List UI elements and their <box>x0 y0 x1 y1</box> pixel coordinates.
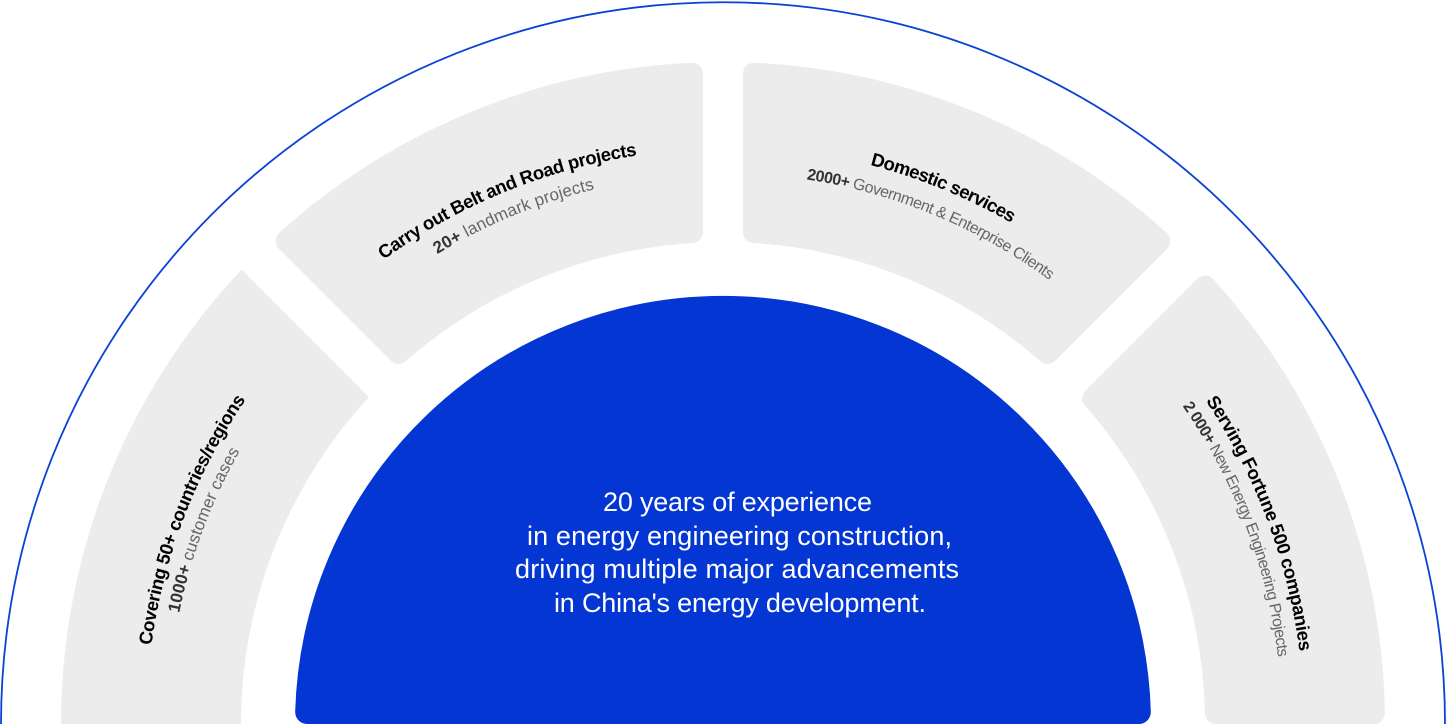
panel: central blue semicircle <box>307 308 1139 712</box>
central text: in China's energy development. <box>554 588 926 618</box>
upper right segment shape <box>754 74 1159 353</box>
central text <box>515 487 959 618</box>
panel: covering countries <box>61 270 369 724</box>
upper right heading: Domestic services <box>871 152 1014 222</box>
panel: fortune 500 <box>1082 276 1385 724</box>
right detail: 2 000+ New Energy Engineering Projects <box>1183 402 1288 656</box>
upper left heading: Carry out Belt and Road projects <box>379 145 636 258</box>
right heading: Serving Fortune 500 companies <box>1208 396 1310 650</box>
blue semicircle shape <box>307 308 1139 712</box>
left segment shape <box>61 270 369 724</box>
central text: 20 years of experience <box>603 487 872 517</box>
upper right detail: 2000+ Government & Enterprise Clients <box>807 169 1053 279</box>
central text: in energy engineering construction, <box>527 521 952 551</box>
central text: driving multiple major advancements <box>515 554 959 584</box>
left segment detail: 1000+ customer cases <box>168 448 238 612</box>
upper left detail: 20+ landmark projects <box>433 181 594 254</box>
panel: belt and road <box>276 62 703 364</box>
right segment shape <box>1093 286 1374 713</box>
upper left segment shape <box>287 74 692 353</box>
panel: domestic services <box>743 62 1170 364</box>
left segment heading: Covering 50+ countries/regions <box>140 396 244 644</box>
